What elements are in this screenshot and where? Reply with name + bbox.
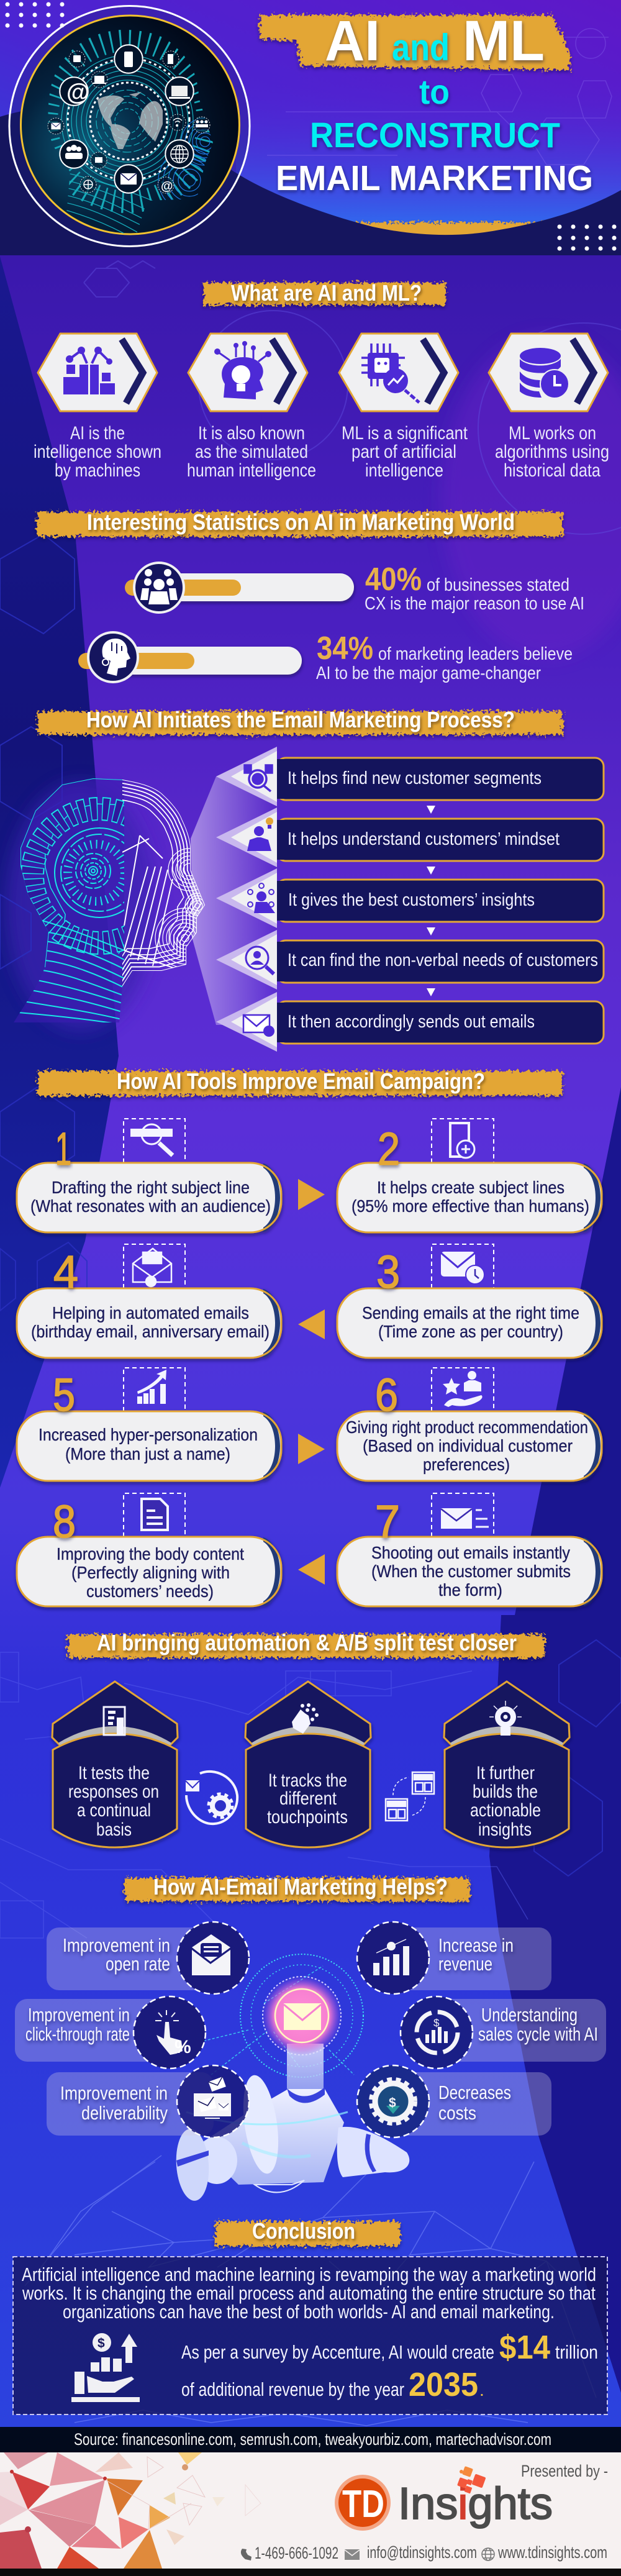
footer [0, 2452, 621, 2576]
caption: human intelligence [187, 460, 316, 481]
card: actionable insights: It further [476, 1763, 535, 1783]
item 8: Improving the body content [57, 1544, 244, 1563]
illustration: AI head outline [14, 778, 205, 1022]
benefit: revenue [357, 1922, 514, 1994]
caption: intelligence shown [34, 442, 161, 462]
icon: idea gear [489, 1701, 522, 1736]
item 8: 8 [53, 1496, 76, 1547]
stat text: 40% [365, 562, 422, 598]
title [276, 9, 593, 198]
contact details [241, 2543, 607, 2562]
logo: TD Insights: TD [342, 2483, 384, 2526]
benefit: open rate: Improvement in [63, 1934, 170, 1956]
item 1: 1 [55, 1123, 71, 1175]
icon: search [130, 1124, 173, 1155]
card: tests responses: basis [96, 1819, 132, 1840]
conclusion box: . [479, 2380, 484, 2400]
icon: pointer percent [155, 2010, 183, 2055]
stat: 40 percent [125, 562, 584, 614]
world map [97, 92, 163, 149]
card: ML part of AI [339, 334, 468, 481]
card: tests responses [52, 1682, 178, 1847]
card: actionable insights: actionable [470, 1800, 541, 1821]
stat text: CX is the major reason to use AI [365, 594, 584, 614]
conclusion box: As per a survey by Accenture, AI would create [181, 2341, 494, 2363]
item 4: 4 [53, 1246, 78, 1298]
arrow left [298, 1309, 325, 1339]
panel: what are AI and ML [34, 280, 609, 481]
item 8 [17, 1496, 281, 1606]
conclusion box: trillion [555, 2341, 598, 2363]
card: ML algorithms [489, 334, 609, 481]
title brush [260, 15, 570, 70]
step 5 [216, 992, 604, 1052]
illustration: holographic rings [193, 1954, 363, 2077]
down arrow [427, 988, 435, 996]
benefit: deliverability [60, 2065, 249, 2137]
item 5 [17, 1369, 281, 1481]
benefit: decreases costs: Decreases [438, 2082, 511, 2103]
icon: revenue hand: $ [97, 2336, 105, 2351]
icon: robot arms [63, 347, 115, 394]
item 7: the form) [438, 1580, 502, 1600]
icon: chip and magnifier [361, 344, 419, 403]
illustration: robot hand [174, 2044, 409, 2202]
heading brush: How AI Initiates the Email Marketing Process? [86, 707, 515, 732]
icon: growth chart [137, 1370, 166, 1404]
step 5: It then accordingly sends out emails [288, 1012, 535, 1032]
benefit: sales cycle [401, 1996, 598, 2069]
item 7: (When the customer submits [371, 1562, 571, 1581]
card: tests responses: It tests the [78, 1763, 150, 1783]
conclusion box: $14 [499, 2329, 550, 2366]
item 4: Helping in automated emails [52, 1303, 249, 1322]
arrow right [298, 1434, 325, 1464]
benefit: click-through rate: % [175, 2037, 191, 2057]
dashed icon frames [124, 1119, 494, 1537]
caption [187, 423, 316, 481]
benefit: revenue: Increase in [438, 1934, 514, 1956]
icon: gear dollar [371, 2079, 415, 2124]
caption [495, 423, 609, 481]
light beam [191, 776, 277, 1025]
card: simulated intelligence [187, 334, 316, 481]
title: RECONSTRUCT [310, 116, 560, 155]
icon: send email [243, 1015, 274, 1037]
item 8: customers’ needs) [86, 1582, 214, 1601]
panel: how AI email marketing helps [15, 1874, 606, 2202]
down arrow [427, 806, 435, 814]
caption: historical data [504, 460, 601, 481]
dot grid bottom-right [558, 225, 616, 251]
icon: new document [450, 1123, 474, 1158]
progress bar [125, 573, 354, 601]
down arrow [427, 867, 435, 875]
icon: recommendation [443, 1371, 483, 1407]
heading brush [215, 2218, 400, 2246]
icon: email clock [441, 1252, 484, 1284]
AI head circle illustration: @ [66, 80, 89, 106]
conclusion box: 2035 [409, 2366, 478, 2403]
icon: emails on monitor [194, 2077, 231, 2119]
stat text: AI to be the major game-changer [316, 663, 541, 683]
item 6 [337, 1369, 602, 1481]
heading brush: AI bringing automation & A/B split test closer [97, 1630, 517, 1655]
stat text [316, 630, 573, 683]
panel: automation and A/B split test [52, 1630, 569, 1847]
contact details: 1-469-666-1092 [255, 2544, 338, 2562]
icon: revenue hand [71, 2333, 140, 2402]
conclusion box: of additional revenue by the year [181, 2378, 404, 2400]
panel: statistics [37, 509, 584, 683]
benefit: click-through rate: Improvement in [28, 2004, 130, 2026]
caption: part of artificial [351, 442, 456, 462]
item 1 [17, 1123, 281, 1232]
title: and [392, 27, 450, 68]
logo: TD Insights [335, 2466, 553, 2531]
item 2: (95% more effective than humans) [351, 1196, 589, 1216]
dotted orbit rings [90, 83, 167, 160]
item 3 [337, 1246, 602, 1358]
item 6: (Based on individual customer [363, 1436, 573, 1455]
icon: sending email [441, 1508, 489, 1529]
stat text: of marketing leaders believe [378, 644, 573, 664]
step 2 [216, 808, 604, 867]
item 6: preferences) [423, 1455, 510, 1474]
title: EMAIL MARKETING [276, 158, 593, 198]
benefit: click-through rate: click-through rate [25, 2023, 130, 2045]
source band [0, 2427, 621, 2452]
translucent label panels [15, 1927, 606, 2136]
heading brush: What are AI and ML? [231, 280, 422, 306]
benefit: click-through rate [25, 1996, 206, 2069]
dot grid top-left [5, 2, 65, 27]
caption: AI is the [70, 423, 125, 444]
down arrow [427, 927, 435, 935]
icon: AI head [88, 632, 138, 682]
step 3: It gives the best customers’ insights [288, 890, 535, 910]
caption: intelligence [365, 460, 443, 481]
step 2: It helps understand customers’ mindset [288, 829, 560, 849]
icon: business team [134, 563, 184, 612]
card: actionable insights [444, 1682, 569, 1847]
item 3: (Time zone as per country) [378, 1322, 563, 1341]
item 5: 5 [53, 1369, 75, 1421]
benefit: decreases costs [357, 2065, 511, 2137]
icon: search person [246, 947, 274, 974]
card: AI definition [34, 334, 161, 481]
header panel [0, 0, 621, 255]
item 6: 6 [375, 1369, 398, 1421]
icon: mindset [247, 817, 273, 851]
item 8: (Perfectly aligning with [71, 1563, 230, 1582]
item 1: (What resonates with an audience) [30, 1196, 271, 1216]
item 2 [337, 1123, 602, 1232]
benefit: open rate [63, 1922, 249, 1994]
arrow left [298, 1554, 325, 1585]
icon: cycle chart: $ [433, 2017, 440, 2029]
benefit: revenue: revenue [438, 1953, 492, 1975]
step 3 [216, 868, 604, 928]
title: AI [325, 9, 380, 73]
item 4: (birthday email, anniversary email) [31, 1322, 270, 1341]
item 7: Shooting out emails instantly [371, 1543, 570, 1562]
card: tracks touchpoints: touchpoints [267, 1807, 348, 1827]
contact details: info@tdinsights.com [367, 2543, 477, 2562]
icon: revenue chart [373, 1939, 409, 1975]
item 3: 3 [376, 1246, 400, 1298]
conclusion box [13, 2257, 607, 2414]
item 1: Drafting the right subject line [52, 1178, 250, 1197]
icon: email automation gear [186, 1772, 237, 1824]
benefit: deliverability: Improvement in [60, 2082, 168, 2104]
card: tracks touchpoints: different [279, 1788, 337, 1809]
arrow right [298, 1179, 325, 1210]
caption: as the simulated [195, 442, 308, 462]
item 7: 7 [375, 1496, 400, 1547]
AI head circle illustration [9, 6, 250, 246]
icon: gear dollar: $ [389, 2096, 396, 2110]
benefit: sales cycle: Understanding [481, 2004, 578, 2026]
caption: ML is a significant [342, 423, 468, 444]
item 4 [17, 1246, 281, 1358]
icon: open envelope [192, 1934, 230, 1975]
card: tests responses: a continual [77, 1800, 151, 1821]
caption [342, 423, 468, 481]
icon: layout exchange [386, 1772, 434, 1821]
decorative polygons [0, 2452, 261, 2569]
item 2: It helps create subject lines [377, 1178, 564, 1197]
AI head circle illustration: @ [161, 180, 173, 193]
caption: ML works on [509, 423, 596, 444]
icon: glowing email button [262, 1976, 342, 2055]
icon: cycle chart [417, 2012, 458, 2053]
item 2: 2 [378, 1123, 400, 1175]
icon: document [142, 1499, 168, 1530]
panel: AI tools improve email campaign [17, 1068, 602, 1606]
item 5: Increased hyper-personalization [39, 1425, 258, 1444]
orbit icons [60, 45, 194, 193]
caption: It is also known [198, 423, 305, 444]
caption: by machines [55, 460, 140, 481]
item 5: (More than just a name) [65, 1444, 230, 1463]
icon: head with bulb [214, 341, 271, 399]
gold brush under curve [342, 222, 546, 247]
benefit: deliverability: deliverability [81, 2102, 168, 2124]
title: ML [463, 9, 545, 73]
heading brush: Interesting Statistics on AI in Marketing World [87, 509, 515, 535]
icon: open envelope gear [133, 1249, 171, 1286]
progress bar [78, 647, 302, 675]
card: tracks touchpoints [245, 1682, 371, 1847]
heading brush: How AI-Email Marketing Helps? [153, 1874, 448, 1900]
card: tests responses: responses on [68, 1782, 159, 1802]
icon: insights [248, 883, 275, 913]
stat text: 34% [317, 630, 373, 667]
card: actionable insights: builds the [473, 1782, 538, 1802]
panel: email marketing process [0, 707, 604, 1052]
logo: TD Insights: Insights [398, 2479, 553, 2529]
icon: report [104, 1707, 125, 1735]
step 1 [216, 747, 604, 806]
title: to [419, 72, 450, 111]
benefit: decreases costs: costs [438, 2102, 476, 2124]
card: actionable insights: insights [478, 1819, 532, 1840]
card: tracks touchpoints: It tracks the [268, 1770, 347, 1791]
stat text [365, 562, 584, 614]
step 4 [216, 930, 604, 990]
heading brush: Conclusion [252, 2218, 355, 2244]
heading brush: How AI Tools Improve Email Campaign? [117, 1068, 485, 1094]
item 3: Sending emails at the right time [362, 1303, 579, 1322]
caption [34, 423, 161, 481]
step 1: It helps find new customer segments [288, 768, 542, 788]
icon: touch [292, 1703, 319, 1734]
benefit: open rate: open rate [106, 1953, 170, 1975]
icon: database and clock [520, 348, 569, 398]
item 7 [337, 1496, 602, 1606]
panel: conclusion [13, 2218, 607, 2414]
icon: customer segments [245, 765, 272, 791]
stat text: of businesses stated [427, 575, 569, 595]
stat: 34 percent [78, 630, 573, 683]
